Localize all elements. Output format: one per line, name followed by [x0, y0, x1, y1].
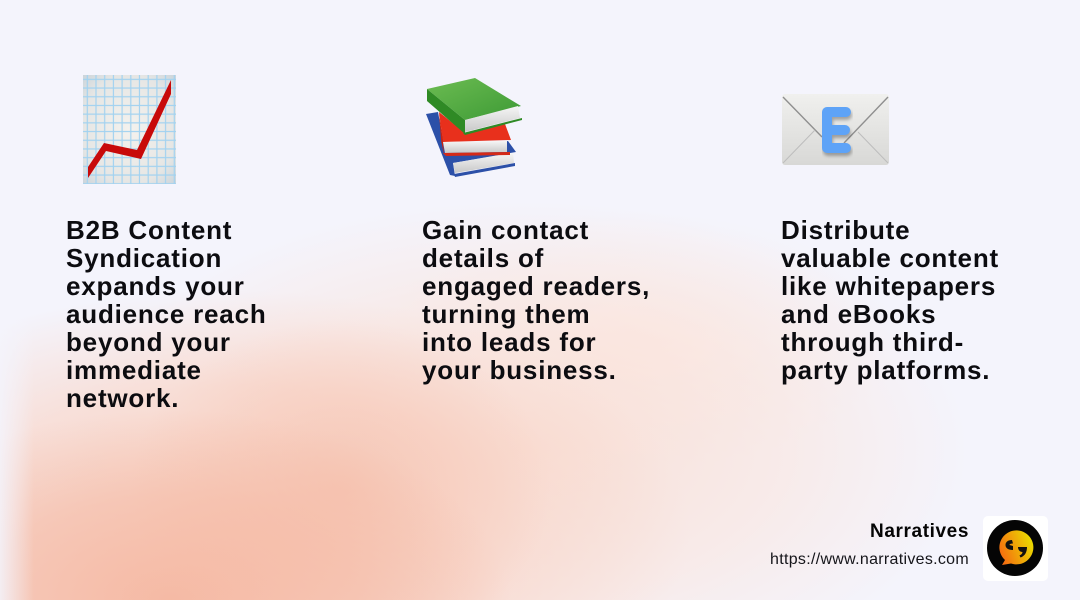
text block: contact details: into leads for [422, 327, 596, 357]
text block: audience reach: audience reach [66, 299, 267, 329]
text block: distribute content: through third- [781, 327, 964, 357]
text block: audience reach: Syndication [66, 243, 222, 273]
text block: contact details: your business. [422, 355, 617, 385]
text block: distribute content: Distribute [781, 215, 910, 245]
text block: audience reach: network. [66, 383, 179, 413]
text block: audience reach: immediate [66, 355, 202, 385]
icon: chart with upward trend [83, 75, 176, 184]
text block: distribute content: valuable content [781, 243, 999, 273]
text block: audience reach: expands your [66, 271, 245, 301]
website url: https://www.narratives.com [770, 551, 969, 568]
text block: contact details: engaged readers, [422, 271, 650, 301]
text block: contact details: details of [422, 243, 544, 273]
text block: distribute content: party platforms. [781, 355, 990, 385]
text block: contact details [422, 215, 650, 385]
logo [983, 516, 1048, 581]
brand name: Narratives [870, 521, 969, 542]
icon: stack of books [426, 78, 522, 177]
text block: distribute content: and eBooks [781, 299, 936, 329]
text block: distribute content [781, 215, 999, 385]
text block: distribute content: like whitepapers [781, 271, 996, 301]
text block: contact details: turning them [422, 299, 590, 329]
text block: audience reach: B2B Content [66, 215, 232, 245]
text block: audience reach [66, 215, 267, 413]
text block: contact details: Gain contact [422, 215, 589, 245]
icon: envelope with letter E [782, 94, 889, 165]
text block: audience reach: beyond your [66, 327, 231, 357]
